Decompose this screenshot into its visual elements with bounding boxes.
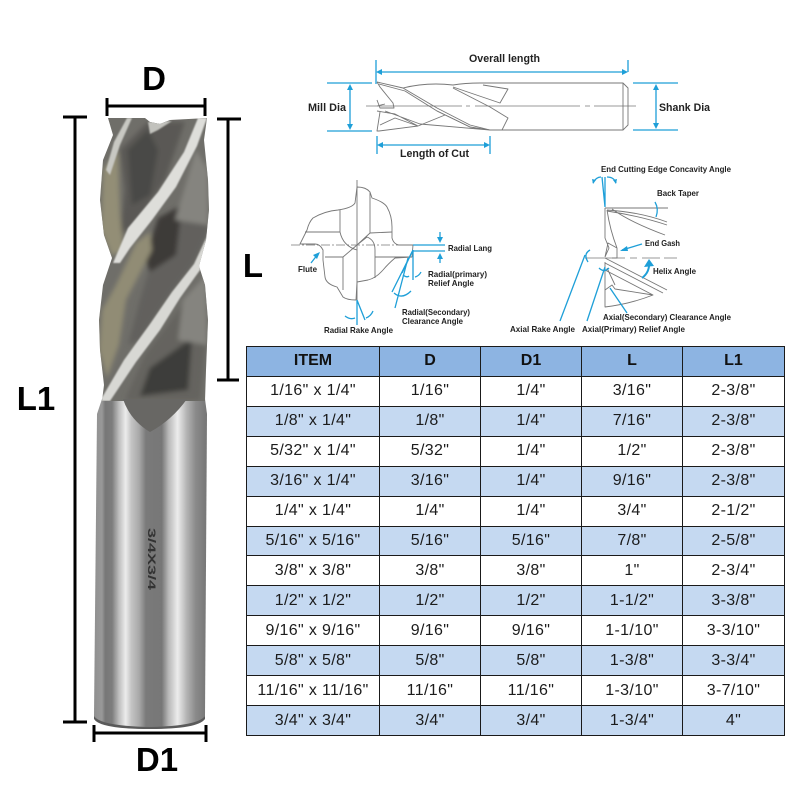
specification table: 4" — [726, 712, 741, 729]
specification table: L — [627, 352, 637, 369]
specification table: 3/16" — [411, 472, 449, 489]
axial rake angle: Axial Rake Angle — [510, 324, 575, 334]
diagram: radial cross section — [291, 180, 492, 335]
specification table: 1/2" — [617, 442, 647, 459]
dimension L1: L1 — [17, 380, 55, 417]
end cutting edge concavity angle: End Cutting Edge Concavity Angle — [601, 164, 731, 174]
specification table: D — [424, 352, 436, 369]
specification table: 2-3/8" — [711, 412, 756, 429]
specification table: 1/4" — [516, 412, 546, 429]
shank dia dimension: Shank Dia — [659, 102, 710, 114]
radial primary relief angle: Relief Angle — [428, 278, 474, 288]
radial rake angle: Radial Rake Angle — [324, 325, 393, 335]
specification table: 11/16" — [407, 682, 453, 699]
specification table: 3/4" — [415, 712, 445, 729]
end mill tool photo — [94, 118, 209, 729]
specification table: 2-3/4" — [711, 562, 756, 579]
specification table: 7/8" — [617, 532, 647, 549]
specification table: 11/16" x 11/16" — [257, 682, 369, 699]
specification table: 1" — [624, 562, 640, 579]
specification table: 1/4" — [516, 442, 546, 459]
dimension D: D — [142, 60, 166, 97]
specification table: 1/4" — [516, 472, 546, 489]
specification table: 3-3/10" — [707, 622, 760, 639]
back taper — [655, 188, 700, 217]
helix angle — [642, 259, 696, 278]
specification table: 3/8" — [516, 562, 546, 579]
fluted section — [99, 118, 209, 401]
shank — [94, 399, 207, 729]
specification table: 3-3/4" — [711, 652, 756, 669]
specification table: 3/4" x 3/4" — [275, 712, 351, 729]
radial primary relief angle — [402, 250, 487, 288]
specification table: 1/4" — [516, 382, 546, 399]
tool outline — [366, 82, 636, 131]
specification table: 5/8" x 5/8" — [275, 652, 351, 669]
end cutting edge concavity angle — [592, 164, 731, 207]
specification table: 1/2" — [415, 592, 445, 609]
mill dia dimension: Mill Dia — [308, 102, 346, 114]
overall length dimension: Overall length — [469, 53, 540, 65]
specification table: 2-3/8" — [711, 382, 756, 399]
specification table — [246, 346, 785, 736]
specification table: 3/16" x 1/4" — [270, 472, 356, 489]
specification table: 1/4" x 1/4" — [275, 502, 351, 519]
specification table: 2-3/8" — [711, 472, 756, 489]
dimension D1: D1 — [136, 741, 178, 778]
axial outline — [585, 208, 677, 307]
specification table: 9/16" — [512, 622, 550, 639]
end gash: End Gash — [645, 238, 680, 248]
radial primary relief angle: Radial(primary) — [428, 269, 487, 279]
dimension L1 — [17, 117, 87, 722]
shank marking: 3/4X3/4 — [145, 528, 157, 591]
specification table: 3-7/10" — [707, 682, 760, 699]
specification table: 3/8" — [415, 562, 445, 579]
length of cut dimension: Length of Cut — [400, 148, 469, 160]
specification table: 1/8" x 1/4" — [275, 412, 351, 429]
specification table: 5/16" — [512, 532, 550, 549]
helix angle: Helix Angle — [653, 266, 696, 276]
specification table: 9/16" — [411, 622, 449, 639]
end gash — [620, 238, 680, 251]
specification table: 7/16" — [613, 412, 651, 429]
radial secondary clearance angle — [392, 250, 470, 326]
specification table: 3-3/8" — [711, 592, 756, 609]
specification table: 2-3/8" — [711, 442, 756, 459]
back taper: Back Taper — [657, 188, 700, 198]
specification table: 2-5/8" — [711, 532, 756, 549]
specification table: 5/16" x 5/16" — [265, 532, 361, 549]
specification table: 1-3/8" — [610, 652, 654, 669]
flute label — [298, 252, 320, 274]
dimension L — [217, 119, 263, 380]
axial primary relief angle — [582, 267, 685, 334]
axial primary relief angle: Axial(Primary) Relief Angle — [582, 324, 685, 334]
specification table: 2-1/2" — [711, 502, 756, 519]
specification table: 5/32" — [411, 442, 449, 459]
specification table: D1 — [521, 352, 541, 369]
specification table: ITEM — [294, 352, 332, 369]
specification table: 1/8" — [415, 412, 445, 429]
axial rake angle — [510, 250, 590, 334]
specification table: 9/16" x 9/16" — [265, 622, 361, 639]
flute run-out — [123, 399, 187, 432]
shank dia dimension — [633, 83, 710, 130]
overall length dimension — [376, 53, 628, 84]
specification table: 1/16" — [411, 382, 449, 399]
specification table: 1-3/4" — [610, 712, 654, 729]
specification table: 1-1/2" — [610, 592, 654, 609]
specification table: L1 — [724, 352, 743, 369]
length of cut dimension — [377, 136, 490, 160]
flute label: Flute — [298, 264, 317, 274]
radial lang marker — [413, 232, 492, 263]
shank bottom edge — [94, 716, 205, 729]
specification table: 9/16" — [613, 472, 651, 489]
specification table: 1/2" x 1/2" — [275, 592, 351, 609]
axial secondary clearance angle: Axial(Secondary) Clearance Angle — [603, 312, 731, 322]
specification table: 1-1/10" — [605, 622, 659, 639]
specification table: 5/32" x 1/4" — [270, 442, 356, 459]
cross section outline — [291, 180, 413, 300]
specification table: 1/16" x 1/4" — [270, 382, 356, 399]
specification table: 3/16" — [613, 382, 651, 399]
specification table: 3/8" x 3/8" — [275, 562, 351, 579]
specification table: 3/4" — [516, 712, 546, 729]
mill dia dimension — [308, 83, 372, 131]
specification table: 1/4" — [516, 502, 546, 519]
specification table: 3/4" — [617, 502, 647, 519]
dimension D1 — [94, 725, 206, 778]
specification table: 5/8" — [516, 652, 546, 669]
radial secondary clearance angle: Clearance Angle — [402, 316, 463, 326]
axial secondary clearance angle — [603, 288, 731, 322]
radial lang marker: Radial Lang — [448, 243, 492, 253]
dimension L: L — [243, 247, 263, 284]
specification table: 1/4" — [415, 502, 445, 519]
radial secondary clearance angle: Radial(Secondary) — [402, 307, 470, 317]
diagram: axial end view — [510, 164, 731, 334]
specification table: 5/16" — [411, 532, 449, 549]
specification table: 1/2" — [516, 592, 546, 609]
diagram: side view with overall dimensions — [308, 53, 710, 160]
dimension D — [107, 60, 205, 116]
specification table: 5/8" — [415, 652, 445, 669]
specification table: 1-3/10" — [605, 682, 659, 699]
specification table: 11/16" — [508, 682, 554, 699]
radial rake angle — [324, 300, 393, 335]
